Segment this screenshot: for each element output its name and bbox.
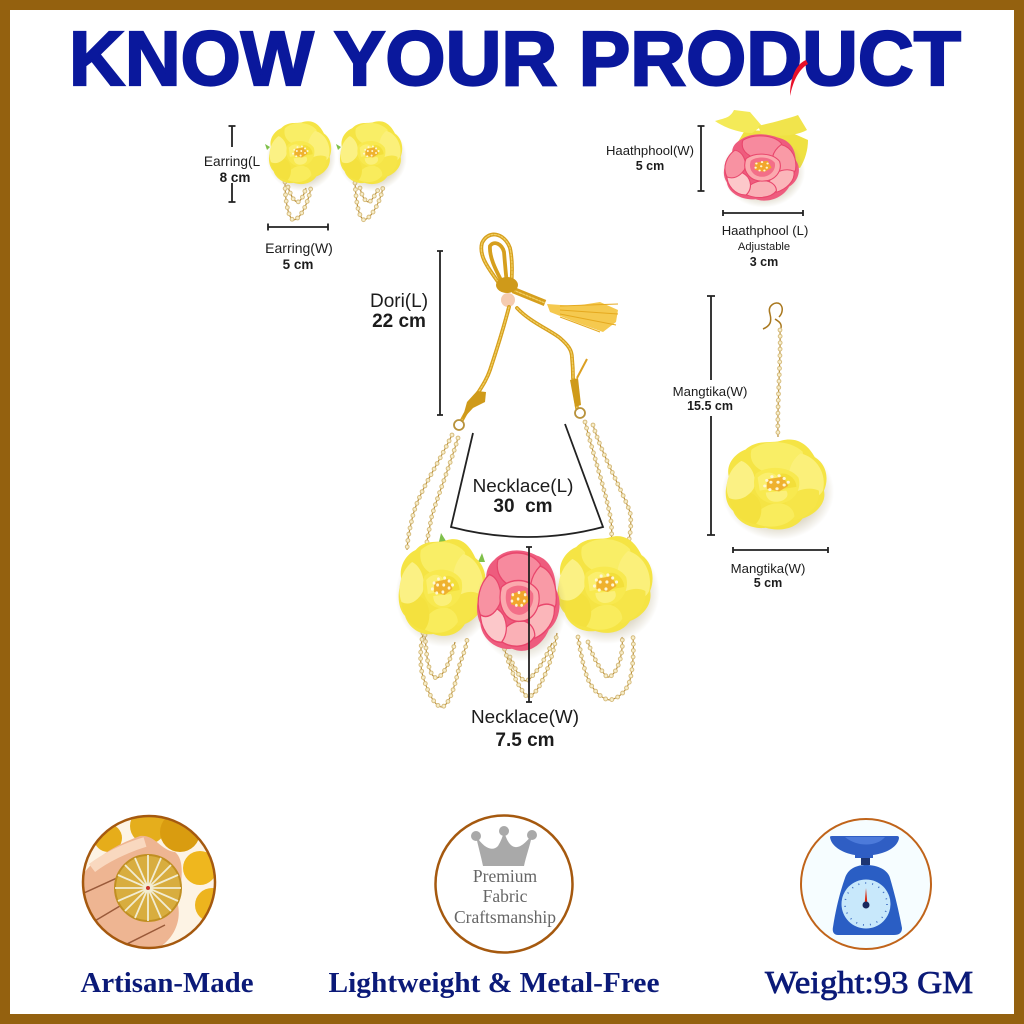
mangtika length measure xyxy=(673,296,747,535)
dori cord and tassel xyxy=(454,234,618,430)
necklace width measure: 7.5 cm xyxy=(495,730,555,751)
badge text xyxy=(454,866,556,927)
earring width measure xyxy=(265,224,333,272)
earring chains xyxy=(285,182,383,220)
badge text: Fabric xyxy=(483,886,528,906)
lightweight label: Lightweight & Metal-Free xyxy=(328,968,660,999)
artisan label: Artisan-Made xyxy=(80,968,253,999)
mangtika hook and chain xyxy=(763,303,782,437)
haathphool length measure: Adjustable xyxy=(738,241,790,253)
earring length measure xyxy=(204,126,261,202)
mangtika width measure: 5 cm xyxy=(754,576,782,590)
artisan photo xyxy=(84,817,214,947)
badge circle xyxy=(436,816,572,952)
earring length measure: 8 cm xyxy=(220,170,250,185)
title: KNOW YOUR PRODUCT xyxy=(69,16,961,102)
haathphool width measure: 5 cm xyxy=(636,159,664,173)
panel: artisan-made xyxy=(80,808,253,999)
necklace length measure: Necklace(L) xyxy=(473,476,573,497)
necklace length measure: 30 cm xyxy=(493,496,553,517)
icon: crown xyxy=(471,826,537,866)
haathphool width measure xyxy=(606,126,704,191)
earring flowers xyxy=(265,121,407,191)
mangtika width measure xyxy=(731,547,828,590)
necklace width measure: Necklace(W) xyxy=(471,707,579,728)
panel: necklace xyxy=(370,234,660,751)
necklace width measure xyxy=(471,547,579,751)
dori length measure: Dori(L) xyxy=(370,291,428,312)
dori length measure xyxy=(370,251,443,415)
panel: lightweight and metal-free xyxy=(328,816,660,999)
pearl strands upper xyxy=(407,422,631,550)
panel: mangtika xyxy=(673,296,834,590)
badge text: Craftsmanship xyxy=(454,907,556,927)
pearl strands lower xyxy=(421,633,633,707)
mangtika width measure: Mangtika(W) xyxy=(731,561,805,576)
earring width measure: 5 cm xyxy=(283,257,313,272)
mangtika flower xyxy=(722,440,834,540)
panel: haathphool xyxy=(606,110,808,269)
weight label: Weight:93 GM xyxy=(765,964,973,1000)
necklace length measure xyxy=(451,424,603,537)
dori length measure: 22 cm xyxy=(372,311,426,332)
haathphool width measure: Haathphool(W) xyxy=(606,143,694,158)
badge circle xyxy=(801,819,931,949)
haathphool length measure: 3 cm xyxy=(750,255,778,269)
earring width measure: Earring(W) xyxy=(265,240,333,256)
haathphool bow xyxy=(715,110,808,168)
mangtika length measure: 15.5 cm xyxy=(687,399,733,413)
icon: kitchen scale xyxy=(830,836,902,935)
mangtika length measure: Mangtika(W) xyxy=(673,384,747,399)
panel: earrings xyxy=(204,121,407,272)
haathphool length measure xyxy=(722,210,808,269)
haathphool flower xyxy=(722,134,805,208)
haathphool length measure: Haathphool (L) xyxy=(722,223,808,238)
earring length measure: Earring(L xyxy=(204,154,261,169)
badge text: Premium xyxy=(473,866,537,886)
panel: weight xyxy=(765,819,973,1000)
necklace flowers xyxy=(395,533,660,661)
